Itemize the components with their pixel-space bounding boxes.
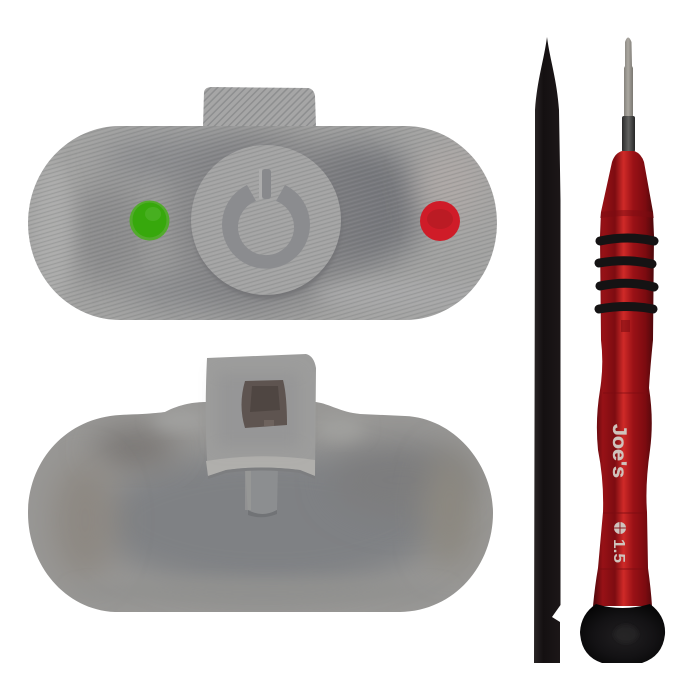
brand text: Joe's bbox=[608, 424, 629, 478]
icon: green LED bbox=[130, 200, 170, 240]
size marking bbox=[610, 522, 627, 563]
round power button bbox=[191, 145, 342, 299]
screwdriver bbox=[580, 38, 665, 663]
back plate bbox=[28, 402, 493, 612]
black ball end bbox=[580, 604, 665, 663]
socket hole bbox=[242, 380, 287, 428]
size marking: 1.5 bbox=[610, 539, 627, 563]
black O-rings bbox=[599, 238, 654, 309]
red handle bbox=[593, 151, 654, 606]
pry tool bbox=[534, 37, 560, 663]
button body plate bbox=[28, 126, 497, 320]
back stem bbox=[245, 465, 278, 517]
square socket block bbox=[206, 354, 316, 479]
icon: red LED bbox=[420, 201, 460, 241]
panel: front of power button part bbox=[20, 87, 510, 330]
top tab bbox=[203, 87, 316, 127]
screwdriver bit bbox=[622, 38, 635, 152]
icon: power symbol bbox=[222, 169, 310, 269]
panel: back of power button part bbox=[28, 354, 493, 612]
